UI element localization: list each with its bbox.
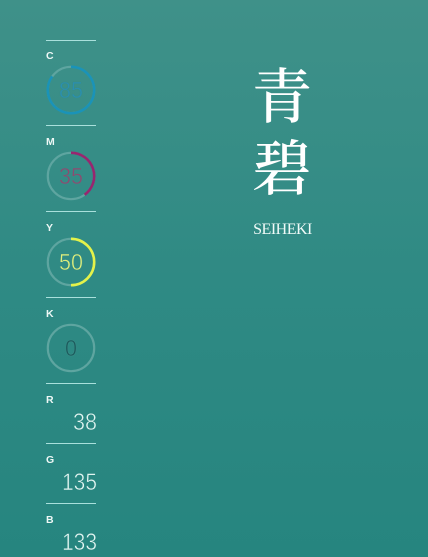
title: 青碧 [252,50,312,208]
value: G 135: 135 [62,469,97,496]
gauge: M 35: M [46,136,55,148]
gauge: C 85: 85 [59,77,83,103]
value: R 38: 38 [73,409,97,436]
value: R 38: R [46,394,54,406]
value: G 135: G [46,454,54,466]
gauge: C 85: C [46,50,54,62]
subtitle: SEIHEKI: SEIHEKI [253,221,312,238]
gauge: M 35 [46,136,94,199]
value: G 135 [46,454,97,496]
gauge: Y 50 [46,222,94,285]
value: B 133 [46,514,97,556]
value: B 133: B [46,514,54,526]
value: B 133: 133 [62,529,97,556]
title: 青碧: 碧 [252,122,312,208]
value: R 38 [46,394,97,436]
gauge: M 35: 35 [59,163,83,189]
gauge: C 85 [46,50,94,113]
gauge: Y 50: 50 [59,249,83,275]
gauge: K 0: 0 [65,335,77,361]
title: 青碧: 青 [252,50,312,136]
gauge: K 0 [46,308,94,371]
gauge: Y 50: Y [46,222,53,234]
gauge: K 0: K [46,308,54,320]
